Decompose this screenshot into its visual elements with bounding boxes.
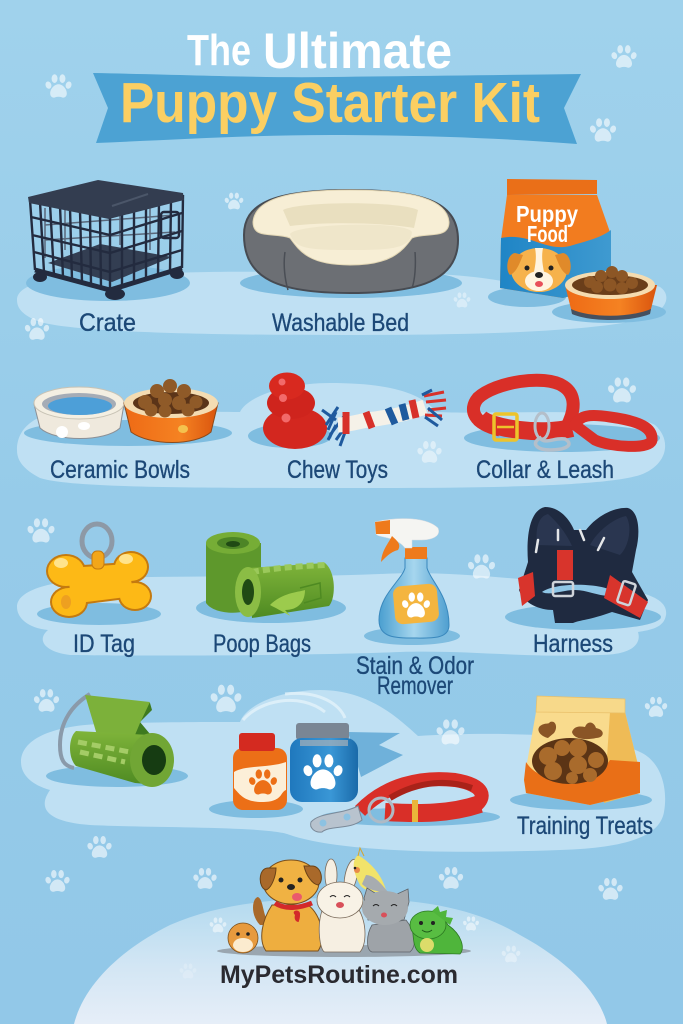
icon: supplement bottle and jar — [209, 723, 403, 818]
mascot: hamster — [228, 923, 258, 953]
label: ID Tag: ID Tag — [73, 630, 135, 658]
icon: puppy food bag and bowl — [488, 179, 666, 323]
label: Stain & Odor Remover: Remover — [377, 672, 453, 700]
icon: harness — [505, 507, 661, 630]
icon: collar and leash — [464, 380, 660, 452]
decorative bubble arcs — [243, 693, 345, 720]
heading line: The Ultimate: Ultimate — [263, 23, 452, 79]
label: Washable Bed: Washable Bed — [272, 309, 409, 337]
icon: ID tag — [37, 524, 161, 625]
label: Training Treats: Training Treats — [517, 812, 653, 840]
title banner — [93, 23, 581, 144]
mascot: dog — [253, 860, 322, 951]
label: Harness: Harness — [533, 630, 613, 658]
icon: spray bottle — [364, 519, 460, 645]
icon: red collar with clasp — [311, 779, 500, 832]
label: Ceramic Bowls: Ceramic Bowls — [50, 456, 190, 484]
mascot: dinosaur — [410, 906, 462, 954]
icon: training treats bag — [510, 696, 652, 810]
label: Crate: Crate — [79, 309, 136, 337]
icon: washable bed — [240, 190, 462, 298]
label: Stain & Odor Remover — [356, 652, 474, 700]
mascot: rabbit — [317, 858, 365, 952]
panel: bottom hill — [74, 898, 607, 1024]
icon: crate — [26, 180, 190, 301]
mascot: bird — [354, 848, 388, 892]
label: Poop Bags: Poop Bags — [213, 630, 311, 658]
heading line: The Ultimate: The — [187, 26, 251, 75]
panel: row 3 cloud — [17, 573, 666, 656]
panel: row 1 cloud — [17, 272, 666, 335]
panel: row 2 cloud — [17, 383, 665, 488]
label: Chew Toys: Chew Toys — [287, 456, 388, 484]
icon: ceramic bowls — [24, 379, 232, 446]
icon: chew toys — [248, 372, 446, 449]
icon: poop bags — [196, 532, 346, 623]
label: Collar & Leash: Collar & Leash — [476, 456, 614, 484]
brand wordmark: MyPetsRoutine.com — [220, 961, 458, 989]
label: Stain & Odor Remover: Stain & Odor — [356, 652, 474, 680]
mascot: pet group — [217, 848, 471, 957]
icon: puppy food bag and bowl: Food — [527, 221, 568, 247]
heading line: Puppy Starter Kit: Puppy Starter Kit — [120, 71, 540, 135]
icon: poop bag holder roll — [46, 694, 188, 787]
icon: puppy food bag and bowl: Puppy — [516, 201, 578, 227]
mascot: cat — [362, 888, 414, 952]
ribbon — [93, 73, 581, 144]
panel: row 4 cloud — [21, 690, 665, 852]
